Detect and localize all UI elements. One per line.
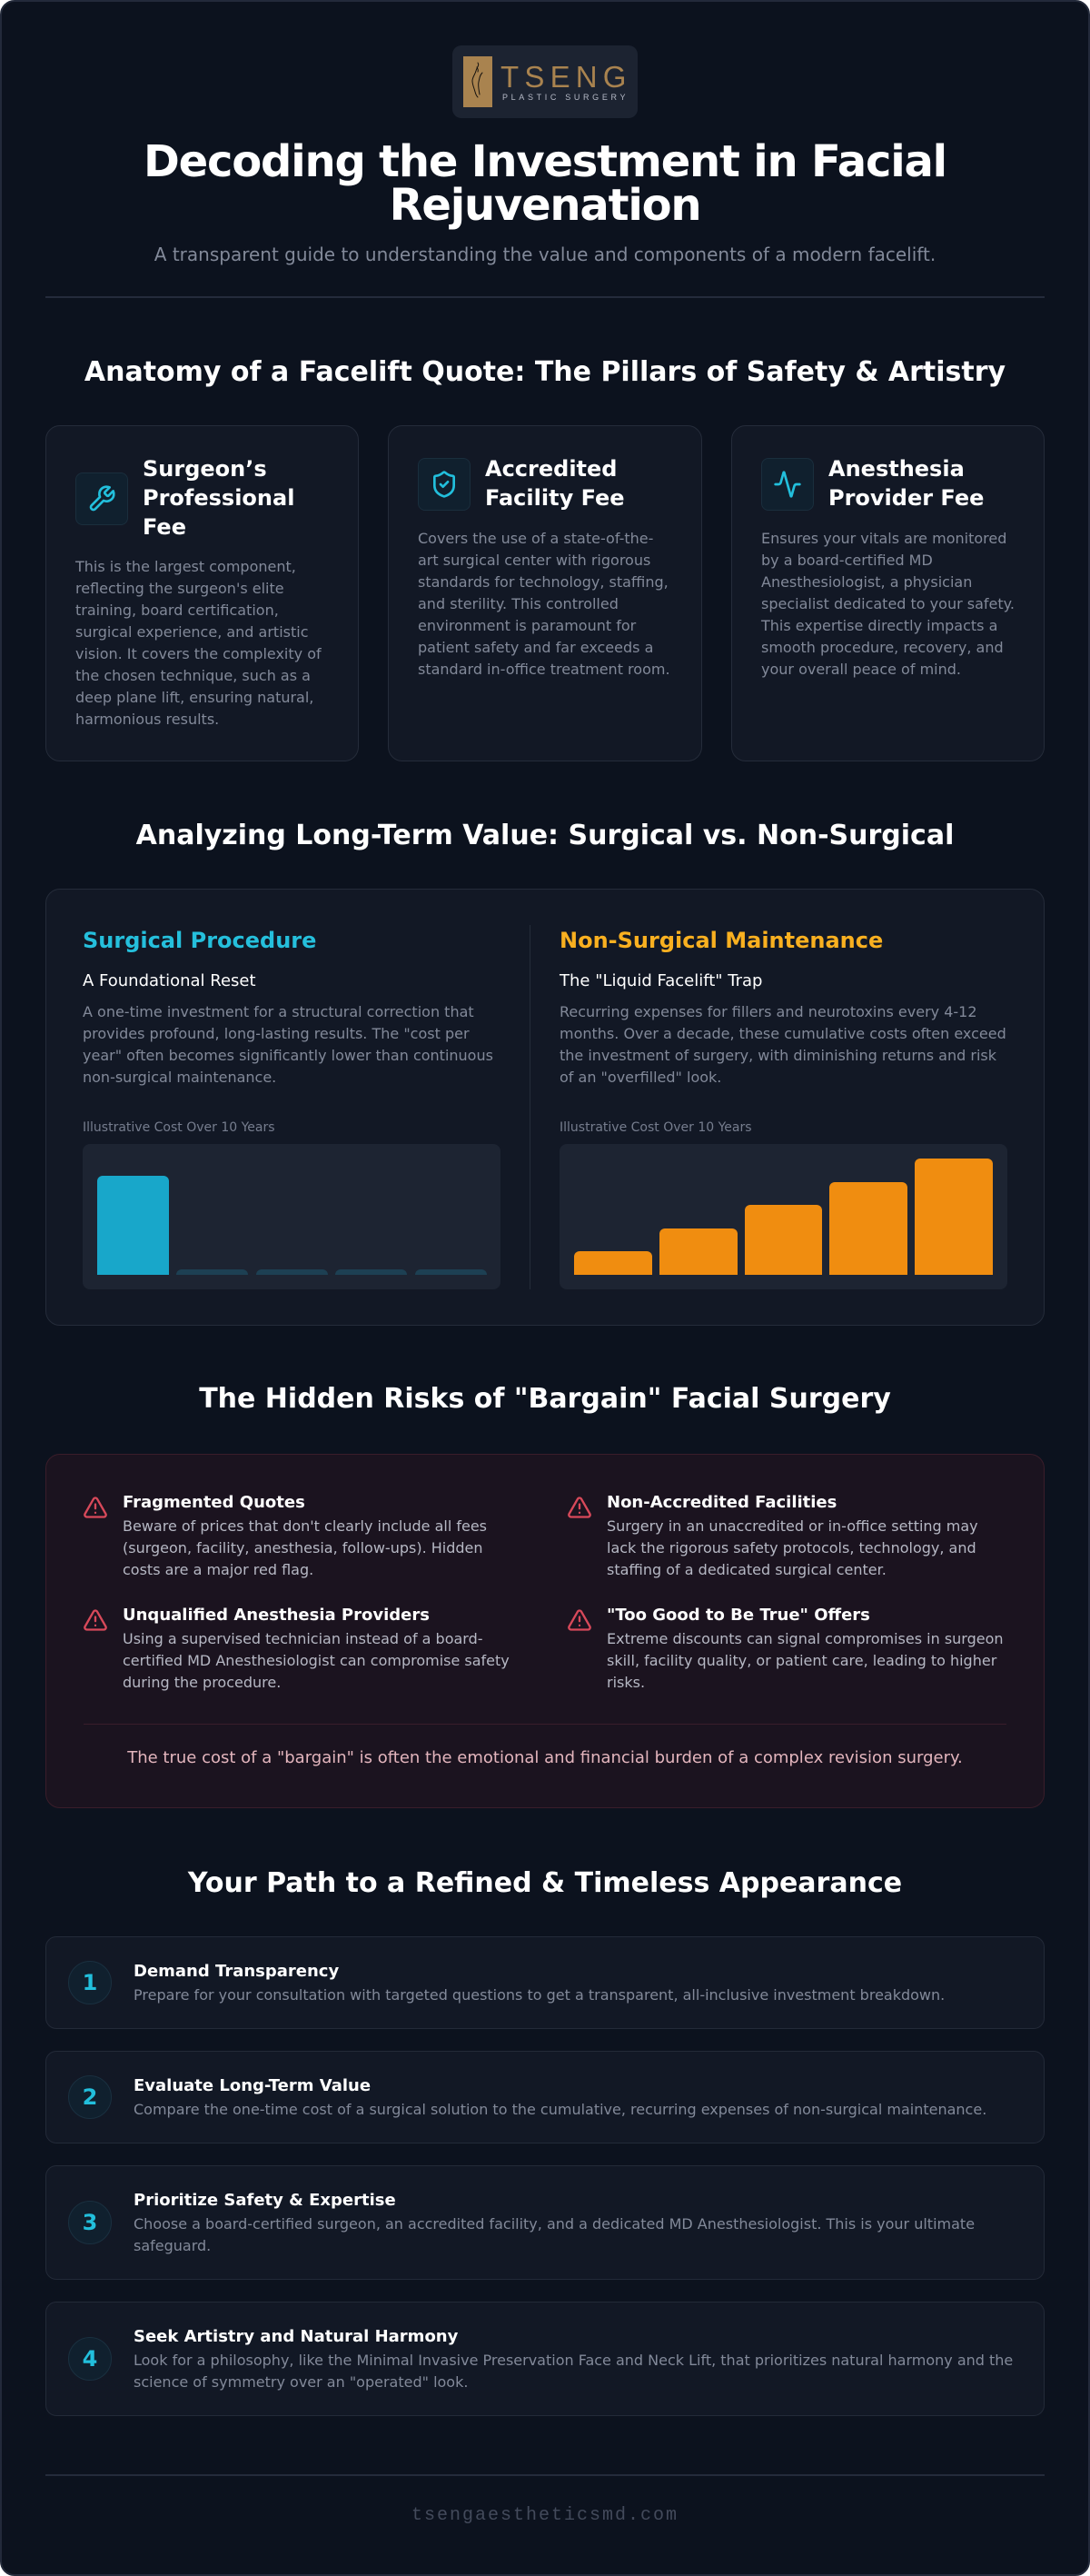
heading: hidden risks: The Hidden Risks of "Bargain" Facial Surgery: [199, 1383, 891, 1415]
step number 3: 3: [83, 2210, 97, 2235]
step text: seek artistry: science of symmetry over an "operated" look.: [134, 2373, 468, 2391]
step number 1: [68, 1961, 112, 2004]
card text: facility fee: [418, 530, 670, 678]
card text: anesthesia fee: Anesthesiologist, a physician: [761, 573, 972, 591]
text: non-surgical description: months. Over a decade, these cumulative costs often exceed: [560, 1025, 1006, 1042]
card title: anesthesia fee: [828, 456, 984, 511]
subheading: a foundational reset: A Foundational Reset: [83, 971, 256, 990]
card text: surgeon's fee: surgical experience, and artistic: [75, 623, 309, 641]
card text: surgeon's fee: reflecting the surgeon's elite: [75, 580, 284, 597]
card text: anesthesia fee: by a board-certified MD: [761, 552, 933, 569]
heading: anatomy of a facelift quote: Anatomy of a Facelift Quote: The Pillars of Safety & Artistry: [84, 356, 1006, 388]
step number 2: [68, 2075, 112, 2119]
card title: anesthesia fee: Provider Fee: [828, 485, 984, 511]
panel: surgical vs non-surgical comparison: [45, 889, 1045, 1326]
bar: period 3: [745, 1205, 822, 1275]
callout: true cost of a bargain: The true cost of a "bargain" is often the emotional and financial burden of a complex revision surgery.: [127, 1748, 963, 1767]
risk text: too good to be true: Extreme discounts can signal compromises in surgeon: [607, 1630, 1004, 1647]
step text: seek artistry: Look for a philosophy, like the Minimal Invasive Preservation Face and Neck Lift, that prioritizes natural harmony and the: [134, 2352, 1013, 2369]
panel: hidden risks: [45, 1454, 1045, 1808]
panel: accredited facility fee: [388, 425, 702, 761]
bar: year 3: [256, 1269, 328, 1275]
bar: period 5: [915, 1159, 993, 1275]
step number 1: 1: [83, 1970, 97, 1995]
text: non-surgical description: of an "overfilled" look.: [560, 1069, 721, 1086]
risk text: non-accredited facilities: [607, 1517, 978, 1578]
heading: path to refined appearance: Your Path to a Refined & Timeless Appearance: [188, 1867, 902, 1899]
text: surgical description: [83, 1003, 493, 1086]
icon: warning triangle: [84, 1609, 107, 1631]
bar chart: surgical cost: [83, 1144, 500, 1289]
card text: surgeon's fee: [74, 558, 322, 728]
card text: anesthesia fee: Ensures your vitals are monitored: [761, 530, 1006, 547]
bar: year 2: [176, 1269, 248, 1275]
logo tagline: PLASTIC SURGERY: [502, 93, 629, 102]
step number 4: 4: [83, 2346, 97, 2372]
text: surgical description: A one-time investment for a structural correction that: [83, 1003, 474, 1020]
text: surgical description: year" often becomes significantly lower than continuous: [83, 1047, 493, 1064]
logo mark: gold panel with silhouette: [463, 56, 492, 107]
card text: facility fee: and sterility. This controlled: [418, 595, 619, 612]
step text: evaluate long-term value: Compare the one-time cost of a surgical solution to the cumulative, recurring expenses of non-surgical maintenance.: [134, 2101, 986, 2118]
step text: prioritize safety: Choose a board-certified surgeon, an accredited facility, and a dedicated MD Anesthesiologist. This is your ultimate: [134, 2215, 975, 2233]
card title: surgeon's fee: Professional: [143, 485, 294, 511]
column heading: surgical procedure: Surgical Procedure: [83, 928, 316, 953]
risk text: unqualified anesthesia providers: Using a supervised technician instead of a board-: [123, 1630, 483, 1647]
title: [144, 136, 946, 231]
bar: period 4: [829, 1182, 907, 1275]
step title: demand transparency: Demand Transparency: [134, 1962, 339, 1981]
text: surgical description: non-surgical maintenance.: [83, 1069, 276, 1086]
bar: year 4: [335, 1269, 407, 1275]
panel: step 1: [45, 1936, 1045, 2029]
logo: [452, 45, 638, 118]
risk text: non-accredited facilities: staffing of a dedicated surgical center.: [607, 1561, 887, 1578]
risk text: too good to be true: skill, facility quality, or patient care, leading to higher: [607, 1652, 996, 1669]
risk title: too good to be true: "Too Good to Be True" Offers: [607, 1606, 870, 1625]
bar chart: non-surgical cost: [560, 1144, 1007, 1289]
bar: year 5: [415, 1269, 487, 1275]
card text: surgeon's fee: This is the largest component,: [75, 558, 296, 575]
step number 4: [68, 2337, 112, 2381]
step title: prioritize safety: Prioritize Safety & Expertise: [134, 2191, 396, 2210]
risk text: too good to be true: risks.: [607, 1674, 645, 1691]
bar: period 1: [574, 1251, 652, 1275]
card title: surgeon's fee: Fee: [143, 514, 186, 540]
step number 3: [68, 2201, 112, 2244]
bar: period 2: [659, 1228, 738, 1275]
card text: anesthesia fee: [761, 530, 1015, 678]
risk text: fragmented quotes: [123, 1517, 487, 1578]
title: Decoding the Investment in Facial: [144, 136, 946, 187]
icon: warning triangle: [568, 1609, 591, 1631]
card title: surgeon's fee: [143, 456, 294, 540]
heading: analyzing long-term value: Analyzing Long-Term Value: Surgical vs. Non-Surgical: [136, 820, 954, 851]
card text: surgeon's fee: harmonious results.: [75, 711, 219, 728]
step text: demand transparency: Prepare for your consultation with targeted questions to get a transparent, all-inclusive investment breakdown.: [134, 1986, 945, 2004]
icon: activity pulse: [761, 458, 814, 511]
card text: anesthesia fee: your overall peace of mind.: [761, 661, 961, 678]
icon: warning triangle: [568, 1497, 591, 1518]
column heading: non-surgical maintenance: Non-Surgical Maintenance: [560, 928, 883, 953]
panel: anesthesia provider fee: [731, 425, 1045, 761]
text: non-surgical description: [560, 1003, 1006, 1086]
risk text: non-accredited facilities: Surgery in an unaccredited or in-office setting may: [607, 1517, 978, 1535]
risk title: unqualified anesthesia providers: Unqualified Anesthesia Providers: [123, 1606, 430, 1625]
risk text: fragmented quotes: costs are a major red flag.: [123, 1561, 313, 1578]
risk text: unqualified anesthesia providers: [123, 1630, 510, 1691]
text: non-surgical description: Recurring expenses for fillers and neurotoxins every 4-12: [560, 1003, 977, 1020]
chart caption: surgical: Illustrative Cost Over 10 Years: [83, 1120, 275, 1135]
step text: prioritize safety: [134, 2215, 975, 2254]
text: surgical description: provides profound, long-lasting results. The "cost per: [83, 1025, 470, 1042]
step text: prioritize safety: safeguard.: [134, 2237, 211, 2254]
logo wordmark: TSENG: [500, 60, 632, 94]
step text: seek artistry: [134, 2352, 1013, 2391]
step number 2: 2: [83, 2084, 97, 2110]
card text: facility fee: standards for technology, staffing,: [418, 573, 669, 591]
panel: step 2: [45, 2051, 1045, 2143]
card text: anesthesia fee: specialist dedicated to your safety.: [761, 595, 1015, 612]
card title: surgeon's fee: Surgeon’s: [143, 456, 267, 482]
step title: evaluate long-term value: Evaluate Long-Term Value: [134, 2076, 371, 2095]
risk text: unqualified anesthesia providers: certified MD Anesthesiologist can compromise safety: [123, 1652, 510, 1669]
card title: facility fee: [485, 456, 625, 511]
step title: seek artistry: Seek Artistry and Natural Harmony: [134, 2327, 458, 2346]
chart caption: non-surgical: Illustrative Cost Over 10 Years: [560, 1120, 752, 1135]
card text: surgeon's fee: training, board certification,: [75, 602, 279, 619]
risk text: unqualified anesthesia providers: during the procedure.: [123, 1674, 281, 1691]
subtitle: A transparent guide to understanding the value and components of a modern facelift.: [154, 244, 936, 265]
card text: facility fee: standard in-office treatment room.: [418, 661, 670, 678]
card title: anesthesia fee: Anesthesia: [828, 456, 965, 482]
risk text: non-accredited facilities: lack the rigorous safety protocols, technology, and: [607, 1539, 976, 1557]
panel: step 4: [45, 2302, 1045, 2416]
card text: facility fee: art surgical center with rigorous: [418, 552, 650, 569]
footer: website: tsengaestheticsmd.com: [411, 2505, 679, 2526]
icon: shield check: [418, 458, 471, 511]
risk title: non-accredited facilities: Non-Accredited Facilities: [607, 1493, 837, 1512]
card text: anesthesia fee: smooth procedure, recovery, and: [761, 639, 1004, 656]
bar: surgery one-time cost: [97, 1176, 169, 1275]
risk title: fragmented quotes: Fragmented Quotes: [123, 1493, 305, 1512]
title: Rejuvenation: [390, 180, 700, 231]
card title: facility fee: Facility Fee: [485, 485, 625, 511]
icon: wrench: [75, 472, 128, 525]
card title: facility fee: Accredited: [485, 456, 617, 482]
card text: surgeon's fee: the chosen technique, such as a: [75, 667, 311, 684]
card text: anesthesia fee: This expertise directly impacts a: [761, 617, 997, 634]
card text: surgeon's fee: vision. It covers the complexity of: [75, 645, 322, 662]
card text: facility fee: patient safety and far exceeds a: [418, 639, 653, 656]
panel: step 3: [45, 2165, 1045, 2280]
risk text: too good to be true: [607, 1630, 1004, 1691]
card text: facility fee: Covers the use of a state-of-the-: [418, 530, 653, 547]
risk text: fragmented quotes: (surgeon, facility, anesthesia, follow-ups). Hidden: [123, 1539, 483, 1557]
risk text: fragmented quotes: Beware of prices that don't clearly include all fees: [123, 1517, 487, 1535]
subheading: liquid facelift trap: The "Liquid Facelift" Trap: [560, 971, 762, 990]
icon: warning triangle: [84, 1497, 107, 1518]
panel: surgeon's professional fee: [45, 425, 359, 761]
card text: surgeon's fee: deep plane lift, ensuring natural,: [75, 689, 313, 706]
card text: facility fee: environment is paramount for: [418, 617, 636, 634]
text: non-surgical description: the investment of surgery, with diminishing returns and risk: [560, 1047, 996, 1064]
